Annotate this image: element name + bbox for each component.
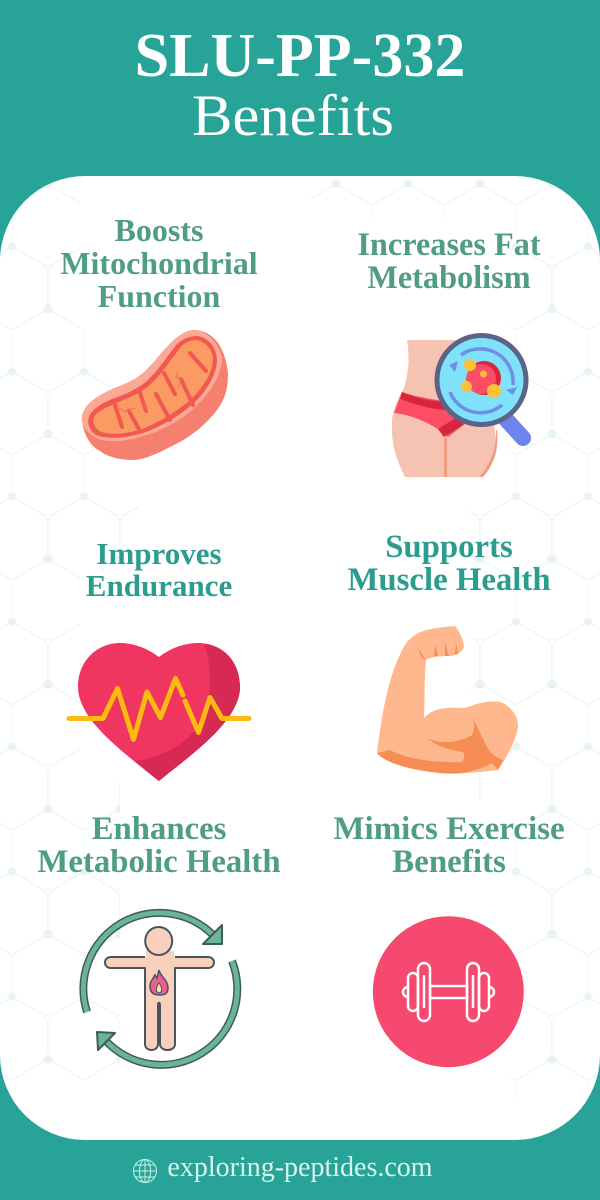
heading: Enhances Metabolic Health: Enhances [92,811,226,847]
heading: Increases Fat Metabolism: Increases Fat [357,226,541,262]
heading: Boosts Mitochondrial Function: Boosts [115,212,203,248]
heading: Mimics Exercise Benefits: Mimics Exercise [333,811,565,847]
heading: Supports Muscle Health: Supports [385,529,513,565]
heading: Boosts Mitochondrial Function: Mitochondrial [60,245,258,281]
heading: Mimics Exercise Benefits: Benefits [392,844,506,880]
icon: body in cycle [83,913,237,1065]
title: SLU-PP-332 [135,22,465,90]
icon: waist with magnifying glass [392,336,526,477]
icon: dumbbell in circle [373,916,524,1067]
icon: heart with pulse [69,643,249,781]
heading: Boosts Mitochondrial Function: Function [98,278,221,314]
heading: Enhances Metabolic Health: Metabolic Health [37,844,281,880]
title [135,22,465,148]
heading: Supports Muscle Health: Muscle Health [347,562,551,598]
heading: Improves Endurance: Improves [96,536,222,571]
title: Benefits [192,83,394,148]
footer website: exploring-peptides.com [167,1152,433,1183]
icon: mitochondrion [82,330,228,460]
heading: Improves Endurance: Endurance [86,568,232,603]
molecular background pattern [0,180,600,1100]
heading: Increases Fat Metabolism: Metabolism [367,259,531,295]
icon: globe [134,1160,156,1182]
icon: flexed arm [377,626,518,774]
